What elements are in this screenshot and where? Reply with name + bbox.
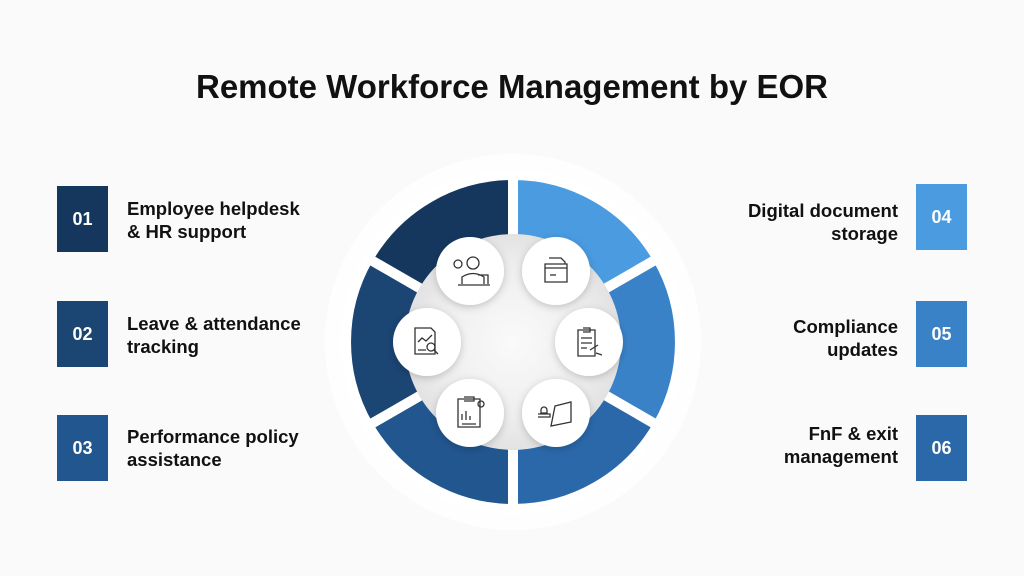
item 04: storage bbox=[831, 223, 898, 244]
item 04 bbox=[748, 184, 967, 250]
item 02: 02 bbox=[72, 324, 93, 344]
item 05: Compliance bbox=[793, 316, 898, 337]
item 03: Performance policy bbox=[127, 426, 299, 447]
icon: compliance bbox=[578, 328, 602, 356]
title: Remote Workforce Management by EOR bbox=[196, 68, 828, 105]
item 05: updates bbox=[827, 339, 898, 360]
item 01: & HR support bbox=[127, 221, 246, 242]
item 03: 03 bbox=[72, 438, 93, 458]
icon: helpdesk bbox=[454, 257, 490, 285]
item 06: management bbox=[784, 446, 898, 467]
item 05 bbox=[793, 301, 967, 367]
item 06: 06 bbox=[931, 438, 952, 458]
item 01: 01 bbox=[72, 208, 93, 228]
icon circles bbox=[393, 237, 623, 447]
item 02: tracking bbox=[127, 336, 199, 357]
item 04: 04 bbox=[931, 206, 952, 226]
icon: analysis bbox=[415, 328, 438, 354]
item 01 bbox=[57, 186, 300, 252]
item 06: FnF & exit bbox=[809, 423, 898, 444]
item 03 bbox=[57, 415, 299, 481]
item 03: assistance bbox=[127, 449, 222, 470]
item 04: Digital document bbox=[748, 200, 898, 221]
item 06 bbox=[784, 415, 967, 481]
item 02 bbox=[57, 301, 301, 367]
item 02: Leave & attendance bbox=[127, 313, 301, 334]
item 05: 05 bbox=[931, 324, 952, 344]
icon: report bbox=[458, 397, 484, 427]
icon: stamp bbox=[538, 402, 571, 426]
icon: folder bbox=[545, 258, 567, 282]
item 01: Employee helpdesk bbox=[127, 198, 300, 219]
